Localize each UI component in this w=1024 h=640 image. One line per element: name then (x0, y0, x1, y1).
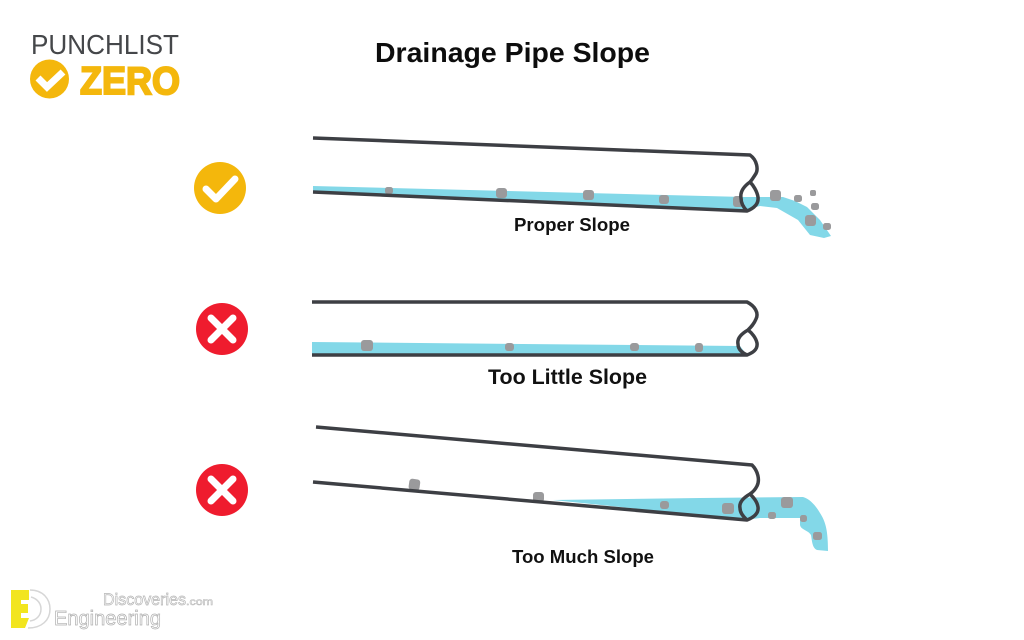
watermark: Engineering Discoveries (11, 590, 213, 630)
icon: check mark (194, 162, 246, 214)
too much slope pipe diagram (313, 427, 828, 551)
water: too little slope (312, 342, 747, 355)
watermark: Engineering Discoveries: Engineering (54, 608, 161, 630)
title: Drainage Pipe Slope (375, 37, 650, 68)
debris: too little slope (361, 340, 703, 352)
debris: proper slope (385, 187, 831, 230)
icon: red cross 2 (196, 464, 248, 516)
watermark: Engineering Discoveries: Discoveries (103, 590, 186, 609)
pipe outline: too little slope (312, 302, 757, 355)
logo: Punchlist Zero (30, 29, 180, 103)
label: too little slope: Too Little Slope (488, 366, 647, 389)
pipe outline: too much slope (313, 427, 758, 520)
logo: Punchlist Zero: PUNCHLIST (31, 29, 179, 60)
label: proper slope: Proper Slope (514, 215, 630, 235)
water: proper slope (313, 186, 831, 238)
watermark: Engineering Discoveries: .com (186, 597, 213, 608)
logo: Punchlist Zero: ZERO (80, 60, 180, 103)
water: too much slope (553, 497, 828, 551)
proper slope pipe diagram (313, 138, 831, 238)
pipe outline: proper slope (313, 138, 758, 211)
too little slope pipe diagram (312, 302, 757, 355)
label: too much slope: Too Much Slope (512, 546, 654, 567)
debris: too much slope (408, 478, 822, 540)
icon: red cross 1 (196, 303, 248, 355)
